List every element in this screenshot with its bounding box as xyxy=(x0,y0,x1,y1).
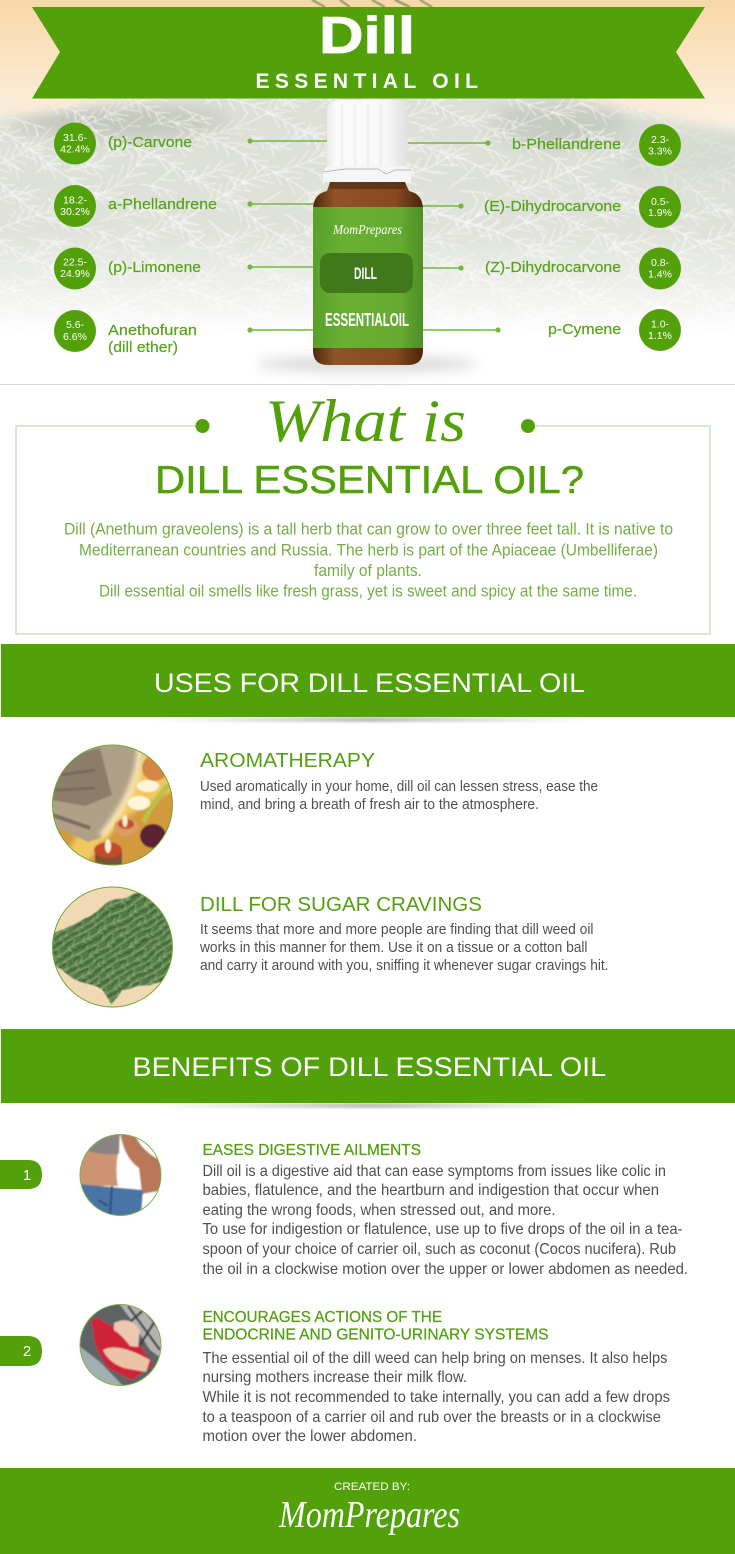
compound: a-Phellandrene: 18.2- xyxy=(63,194,87,206)
compound: (p)-Carvone: 42.4% xyxy=(60,144,90,156)
compound: (E)-Dihydrocarvone xyxy=(484,186,681,228)
description: family of plants. xyxy=(314,561,422,580)
photo: hot water bottle xyxy=(80,1305,160,1385)
text: Dill oil is a digestive aid that can ease symptoms from issues like colic in xyxy=(202,1163,666,1180)
text: Used aromatically in your home, dill oil can lessen stress, ease the xyxy=(200,778,598,795)
description: Dill (Anethum graveolens) is a tall herb that can grow to over three feet tall. It is native to xyxy=(64,520,673,538)
compound: (E)-Dihydrocarvone: 0.5- xyxy=(651,196,670,208)
compound: (E)-Dihydrocarvone: 1.9% xyxy=(648,207,672,219)
benefit 2 xyxy=(0,1302,670,1445)
divider xyxy=(0,384,735,385)
description: Mediterranean countries and Russia. The herb is part of the Apiaceae (Umbelliferae) xyxy=(79,540,658,560)
description xyxy=(64,520,673,600)
heading: ENDOCRINE AND GENITO-URINARY SYSTEMS xyxy=(202,1326,548,1344)
photo: dill bunch xyxy=(48,887,178,1008)
text: While it is not recommended to take internally, you can add a few drops xyxy=(202,1389,670,1406)
number tab: 2 xyxy=(23,1343,31,1360)
compound: (p)-Carvone xyxy=(54,122,192,164)
text xyxy=(202,1163,688,1278)
compound: p-Cymene: 1.0- xyxy=(651,318,670,330)
compound: p-Cymene: p-Cymene xyxy=(548,322,621,338)
text: the oil in a clockwise motion over the upper or lower abdomen as needed. xyxy=(202,1261,688,1278)
compound: (p)-Carvone: 31.6- xyxy=(63,132,87,144)
compound: p-Cymene xyxy=(548,309,681,351)
credit label: CREATED BY: xyxy=(334,1481,410,1493)
text: to a teaspoon of a carrier oil and rub over the breasts or in a clockwise xyxy=(202,1409,661,1426)
text: spoon of your choice of carrier oil, such as coconut (Cocos nucifera). Rub xyxy=(202,1241,676,1258)
bottle label: essential oil: ESSENTIALOIL xyxy=(325,310,409,330)
text: babies, flatulence, and the heartburn and indigestion that occur when xyxy=(202,1182,659,1199)
script heading: What is xyxy=(265,388,466,454)
use: sugar cravings xyxy=(48,887,608,1008)
compound: (p)-Limonene: (p)-Limonene xyxy=(108,260,201,276)
heading: DILL FOR SUGAR CRAVINGS xyxy=(200,894,482,916)
compound: (p)-Limonene: 24.9% xyxy=(60,268,90,280)
compound: a-Phellandrene: a-Phellandrene xyxy=(108,197,217,213)
compound: (p)-Carvone: (p)-Carvone xyxy=(108,135,192,151)
compound: b-Phellandrene: b-Phellandrene xyxy=(512,137,621,153)
essential oil bottle xyxy=(257,100,477,373)
compound: (p)-Limonene: 22.5- xyxy=(63,256,87,268)
main heading: DILL ESSENTIAL OIL? xyxy=(155,459,584,502)
text: mind, and bring a breath of fresh air to the atmosphere. xyxy=(200,796,539,813)
compound: (Z)-Dihydrocarvone: 0.8- xyxy=(651,257,670,269)
heading: EASES DIGESTIVE AILMENTS xyxy=(202,1142,421,1159)
compound: Anethofuran xyxy=(54,310,197,356)
section header: benefits: BENEFITS OF DILL ESSENTIAL OIL xyxy=(132,1052,606,1082)
text: motion over the lower abdomen. xyxy=(202,1428,417,1445)
text: The essential oil of the dill weed can help bring on menses. It also helps xyxy=(202,1350,668,1367)
text: eating the wrong foods, when stressed out, and more. xyxy=(202,1202,556,1219)
compound: b-Phellandrene xyxy=(512,124,681,166)
number tab xyxy=(0,1336,42,1366)
photo: waist and jeans xyxy=(80,1135,160,1215)
compound: a-Phellandrene: 30.2% xyxy=(60,206,90,218)
text: It seems that more and more people are finding that dill weed oil xyxy=(200,921,594,938)
heading: ENCOURAGES ACTIONS OF THE xyxy=(202,1309,442,1326)
footer xyxy=(0,1468,735,1554)
benefit 1 xyxy=(0,1132,688,1278)
text: To use for indigestion or flatulence, use up to five drops of the oil in a tea- xyxy=(202,1221,682,1238)
left compounds list xyxy=(54,122,217,356)
text xyxy=(199,921,608,974)
compound: Anethofuran: Anethofuran xyxy=(108,323,197,339)
use: aromatherapy xyxy=(52,745,598,868)
compound: (p)-Limonene xyxy=(54,248,201,290)
text xyxy=(200,778,598,813)
panel: what is dill essential oil xyxy=(16,388,710,634)
heading xyxy=(202,1309,548,1344)
text: works in this manner for them. Use it on a tissue or a cotton ball xyxy=(199,939,588,956)
title banner xyxy=(32,7,705,98)
compound: Anethofuran: 6.6% xyxy=(63,331,87,343)
composition connector lines xyxy=(247,138,501,333)
section header: benefits xyxy=(1,1029,735,1108)
compound: b-Phellandrene: 2.3- xyxy=(651,134,670,146)
bottle label: dill plate xyxy=(320,253,413,293)
compound: (Z)-Dihydrocarvone: (Z)-Dihydrocarvone xyxy=(485,260,621,276)
brand: MomPrepares xyxy=(278,1494,460,1536)
compound: Anethofuran: 5.6- xyxy=(66,319,85,331)
compound: p-Cymene: 1.1% xyxy=(648,330,672,342)
heading: AROMATHERAPY xyxy=(200,750,375,772)
section header: uses xyxy=(1,644,735,722)
right compounds list xyxy=(484,124,681,351)
number tab: 1 xyxy=(23,1167,31,1184)
compound: Anethofuran: (dill ether) xyxy=(108,340,178,356)
bottle label: brand: MomPrepares xyxy=(332,223,402,238)
background: dill fronds over warm sky xyxy=(0,0,735,314)
title: Dill: Dill xyxy=(319,7,415,65)
compound: a-Phellandrene xyxy=(54,185,217,227)
description: Dill essential oil smells like fresh grass, yet is sweet and spicy at the same time. xyxy=(99,582,637,600)
photo: candles and towels xyxy=(52,745,173,868)
text: nursing mothers increase their milk flow. xyxy=(202,1369,467,1386)
bottle label: dill plate: DILL xyxy=(354,264,377,283)
subtitle: essential oil: ESSENTIAL OIL xyxy=(256,70,478,93)
compound: (Z)-Dihydrocarvone: 1.4% xyxy=(648,268,672,280)
section header: uses: USES FOR DILL ESSENTIAL OIL xyxy=(154,668,585,698)
compound: (E)-Dihydrocarvone: (E)-Dihydrocarvone xyxy=(484,199,621,215)
compound: b-Phellandrene: 3.3% xyxy=(648,146,672,158)
text: and carry it around with you, sniffing it whenever sugar cravings hit. xyxy=(200,957,608,974)
compound: (Z)-Dihydrocarvone xyxy=(485,248,681,290)
text xyxy=(202,1350,670,1445)
number tab xyxy=(0,1160,42,1189)
